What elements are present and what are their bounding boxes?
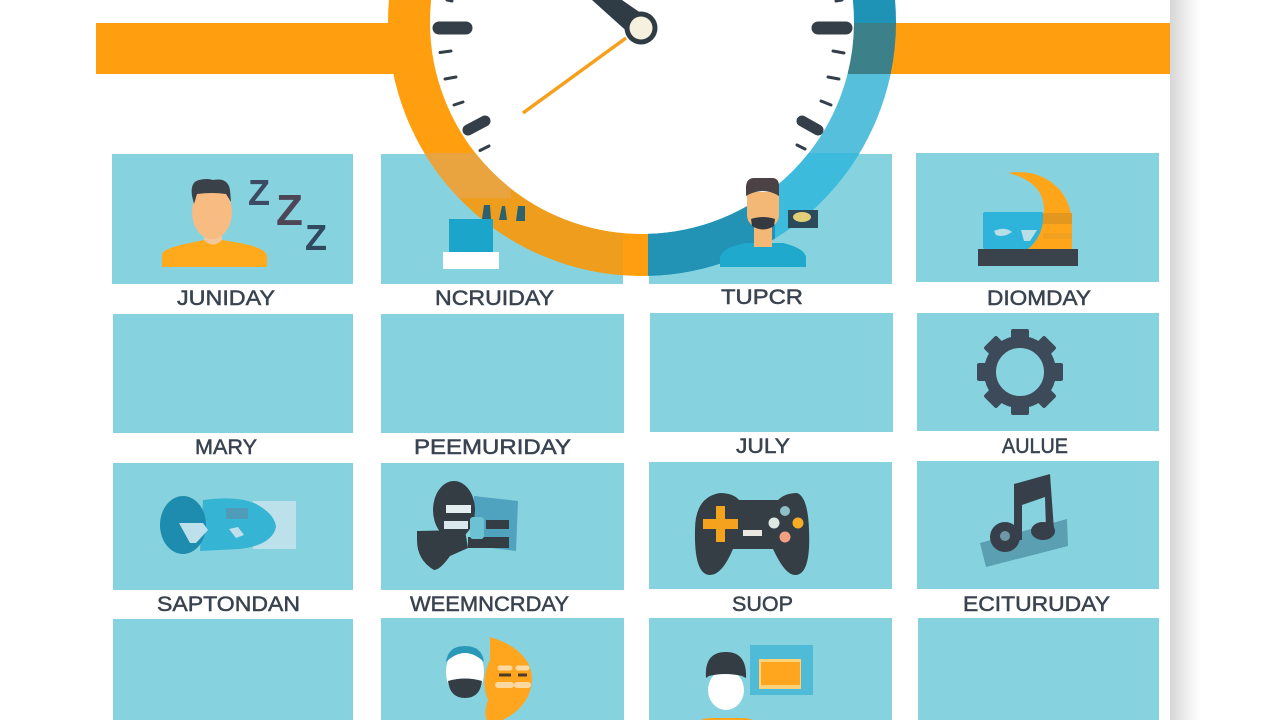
day labels: SAPTONDAN: [157, 593, 300, 616]
orange header band: [96, 23, 1170, 74]
icon: bearded person: [720, 178, 818, 267]
day labels: ECITURUDAY: [963, 593, 1110, 616]
icon: sleeping person: Z: [276, 186, 303, 235]
day labels: JUNIDAY: [177, 287, 275, 310]
clock ticks: [439, 0, 846, 150]
day labels: NCRUIDAY: [435, 287, 554, 310]
panel grid: [112, 153, 1159, 720]
clock: [409, 0, 875, 255]
icon: person with moon: [437, 637, 532, 720]
icon: sleeping person: [162, 172, 327, 267]
icon: VR headset: [160, 496, 296, 554]
page shadow: [1170, 0, 1200, 720]
icon: gear: [977, 329, 1063, 415]
icon: laptop: [443, 205, 525, 269]
day labels: TUPCR: [721, 286, 803, 309]
icon: moon and landscape: [978, 172, 1078, 266]
clock hands: [523, 0, 658, 113]
day labels: JULY: [736, 435, 790, 458]
icon: person with screen: [697, 645, 813, 720]
day labels: WEEMNCRDAY: [410, 593, 569, 616]
day labels: AULUE: [1002, 435, 1068, 458]
clock ring: [409, 0, 875, 255]
day labels: MARY: [195, 436, 257, 459]
day labels: SUOP: [732, 593, 793, 616]
day labels: PEEMURIDAY: [414, 436, 571, 459]
day labels: DIOMDAY: [987, 287, 1091, 310]
icon: sleeping person: Z: [305, 217, 327, 258]
icon: sleeping person: Z: [248, 172, 270, 213]
icon: music note: [980, 474, 1068, 567]
day labels: [157, 286, 1110, 616]
icon: gamepad: [695, 493, 809, 575]
icon: person with card: [417, 481, 518, 570]
